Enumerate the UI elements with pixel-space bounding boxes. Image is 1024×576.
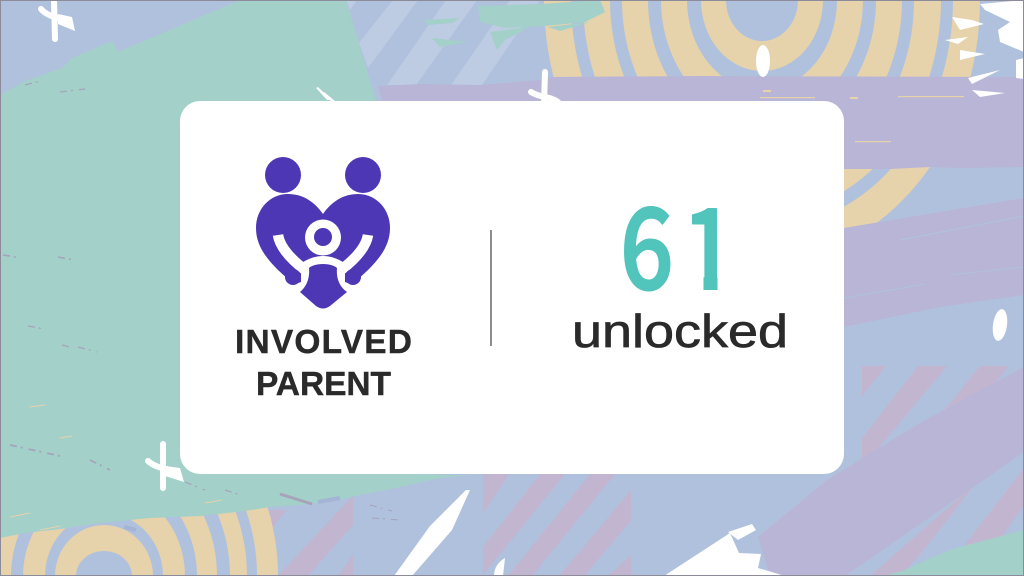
pink stripes bottom centre: [268, 474, 631, 576]
pink stripes lower right: [862, 366, 1024, 576]
lavender wedge right: [844, 198, 1024, 327]
cross mark bottom left: [148, 444, 184, 488]
number: 61: 1: [682, 159, 736, 321]
heading: badge name: [235, 324, 412, 403]
concentric arcs bottom left: [0, 375, 278, 576]
light diagonal stripes top centre: [346, 0, 540, 85]
teal patch bottom right: [884, 530, 1024, 576]
number: 61: [620, 159, 738, 321]
heading: badge name: INVOLVED: [235, 324, 412, 361]
brush specks: [3, 81, 400, 520]
cross mark centre top: [531, 72, 558, 104]
teal brush patches top: [424, 0, 605, 50]
panel: white card: [180, 101, 844, 474]
large teal brush shape: [0, 0, 470, 538]
heading: badge name: PARENT: [256, 366, 392, 403]
white brush streaks: [316, 0, 1024, 576]
lavender diagonal brush lower right: [758, 367, 1024, 576]
white blobs: [494, 45, 1009, 576]
label: unlocked: unlocked: [572, 305, 788, 357]
lavender brush band top: [378, 76, 1024, 169]
divider: [490, 230, 492, 346]
concentric arcs top right: [544, 0, 980, 262]
number: 61: 6: [620, 159, 674, 321]
icon: parents and child heart logo: [256, 157, 390, 308]
cross mark top left: [41, 0, 75, 39]
